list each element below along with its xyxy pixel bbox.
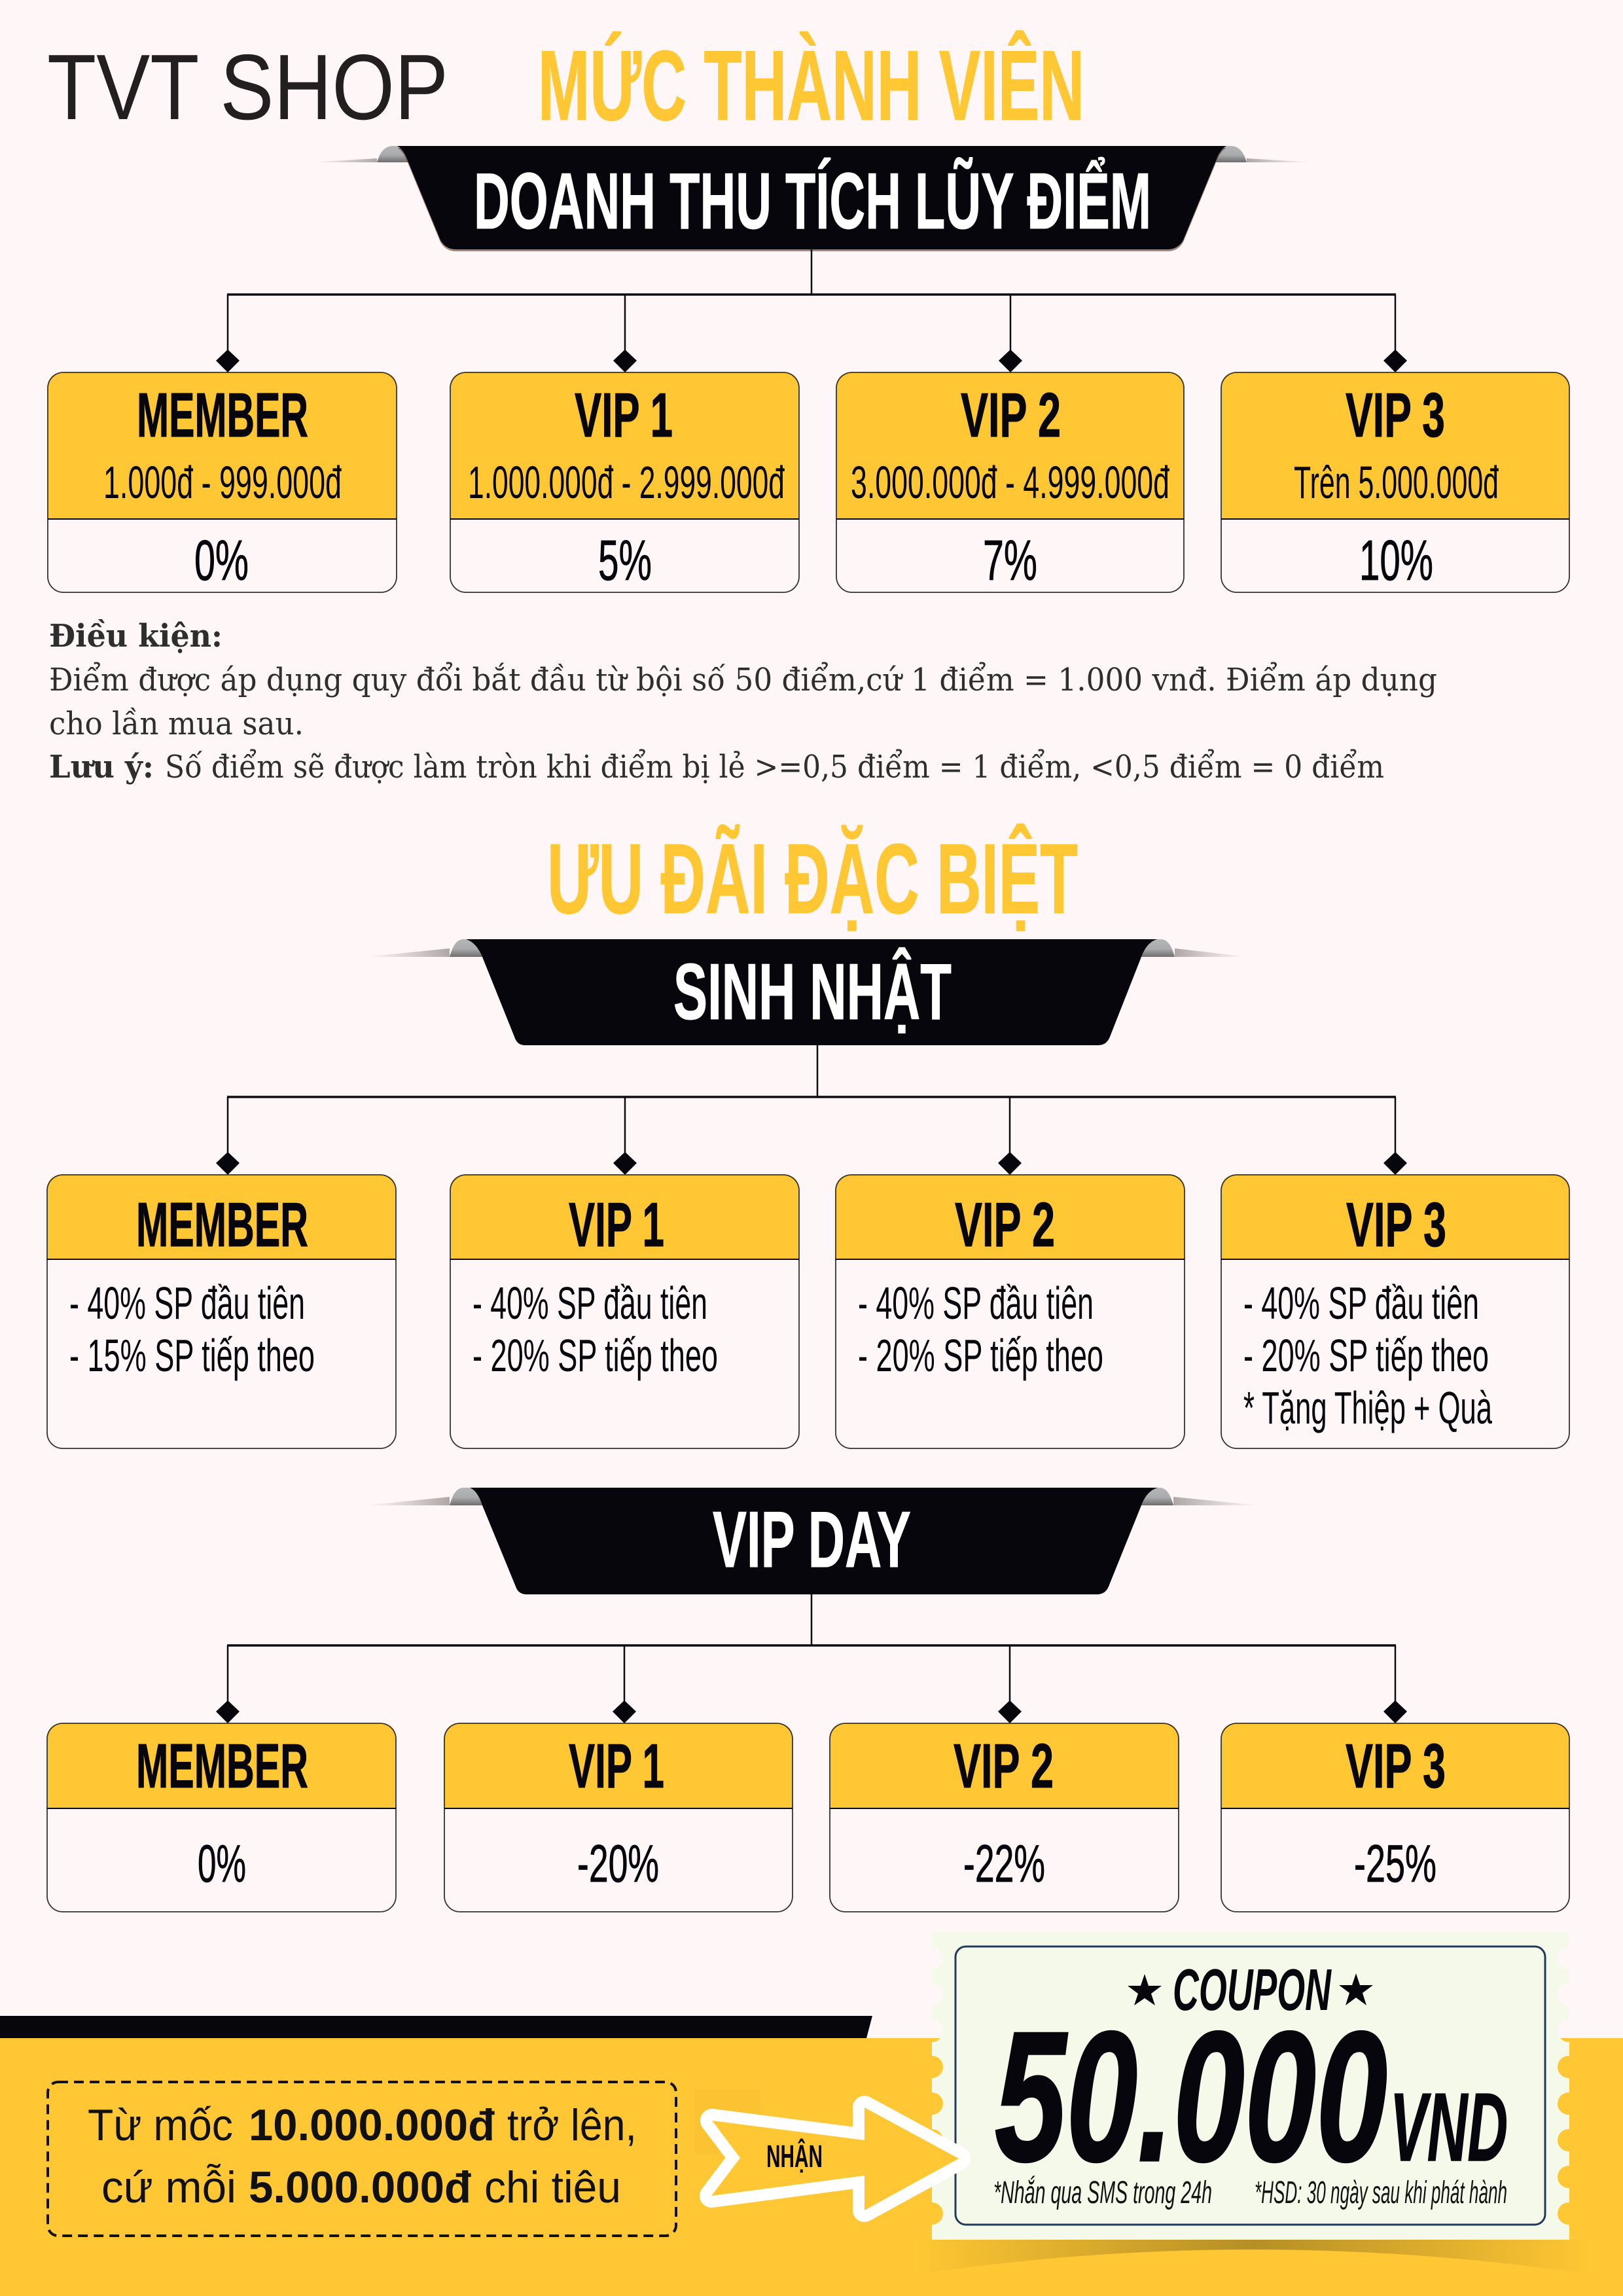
text block: conditions: Lưu ý: <box>49 749 154 785</box>
card: VIP 3 VIP day <box>1221 1723 1569 1912</box>
card: VIP 2 VIP day: VIP 2 <box>954 1731 1054 1801</box>
dashed callout: spending condition: Từ mốc <box>88 2100 233 2150</box>
card: VIP 1 VIP day: -20% <box>577 1835 659 1893</box>
card: VIP 2 level <box>836 372 1184 592</box>
card: VIP 3 VIP day: -25% <box>1354 1835 1436 1893</box>
connector tree: birthday <box>216 1045 1407 1175</box>
coupon currency: VND <box>1390 2073 1508 2181</box>
dashed callout: spending condition: trở lên, <box>507 2100 637 2150</box>
coupon note: SMS: *Nhắn qua SMS trong 24h <box>993 2176 1212 2210</box>
dashed callout: spending condition: cứ mỗi <box>101 2162 236 2212</box>
card: VIP 3 birthday: - 20% SP tiếp theo <box>1243 1330 1489 1381</box>
banner: VIP DAY <box>365 1488 1260 1594</box>
card: MEMBER VIP day: MEMBER <box>136 1731 308 1801</box>
title: TVT SHOP: TVT SHOP <box>47 35 448 139</box>
card: VIP 1 level: VIP 1 <box>575 380 673 450</box>
card: MEMBER level: 0% <box>194 529 249 592</box>
card: VIP 2 VIP day <box>830 1723 1179 1912</box>
card: VIP 3 level: VIP 3 <box>1346 380 1445 450</box>
card: VIP 2 birthday: - 20% SP tiếp theo <box>858 1330 1103 1381</box>
dashed callout: spending condition: chi tiêu <box>484 2162 621 2212</box>
connector tree: VIP day <box>216 1594 1407 1723</box>
card: VIP 1 birthday: - 20% SP tiếp theo <box>473 1330 718 1381</box>
card: VIP 3 level <box>1221 372 1569 592</box>
card: MEMBER level <box>48 372 397 592</box>
card: MEMBER birthday: - 40% SP đầu tiên <box>69 1278 305 1329</box>
card: VIP 3 level: Trên 5.000.000đ <box>1294 457 1499 508</box>
dashed callout: spending condition: 10.000.000đ <box>249 2100 495 2150</box>
card: VIP 3 birthday <box>1221 1175 1569 1448</box>
card: MEMBER level: 1.000đ - 999.000đ <box>103 457 342 508</box>
banner: VIP DAY: VIP DAY <box>713 1495 911 1584</box>
banner: SINH NHẬT: SINH NHẬT <box>673 947 952 1036</box>
card: VIP 3 VIP day: VIP 3 <box>1346 1731 1446 1801</box>
card: VIP 2 birthday: VIP 2 <box>955 1190 1055 1260</box>
card: VIP 1 VIP day: VIP 1 <box>569 1731 664 1801</box>
card: VIP 3 birthday: - 40% SP đầu tiên <box>1243 1278 1479 1329</box>
banner: DOANH THU TÍCH LŨY ĐIỂM: DOANH THU TÍCH LŨY ĐIỂM <box>474 156 1151 245</box>
text block: conditions: Số điểm sẽ được làm tròn khi điểm bị lẻ >=0,5 điểm = 1 điểm, <0,5 điểm = 0 điểm <box>165 749 1384 785</box>
dashed callout: spending condition <box>48 2082 676 2236</box>
card: VIP 3 level: 10% <box>1359 529 1433 592</box>
card: MEMBER level: MEMBER <box>137 380 308 450</box>
banner: DOANH THU TÍCH LŨY ĐIỂM <box>310 146 1314 251</box>
text block: conditions: Điểm được áp dụng quy đổi bắt đầu từ bội số 50 điểm,cứ 1 điểm = 1.000 vnđ. Điểm áp dụng <box>49 662 1437 698</box>
card: VIP 2 level: 7% <box>983 529 1037 592</box>
card: VIP 1 birthday: - 40% SP đầu tiên <box>473 1278 707 1329</box>
card: VIP 2 level: 3.000.000đ - 4.999.000đ <box>851 457 1169 508</box>
card: VIP 1 level <box>450 372 799 592</box>
coupon ticket <box>921 1932 1580 2240</box>
card: VIP 3 birthday: VIP 3 <box>1346 1190 1446 1260</box>
text block: conditions <box>49 618 1437 785</box>
card: VIP 2 birthday <box>836 1175 1185 1448</box>
footer band <box>0 2016 1623 2296</box>
arrow: NHẬN: NHẬN <box>766 2138 823 2174</box>
coupon label: COUPON <box>1173 1958 1332 2023</box>
arrow: NHẬN <box>711 2108 959 2210</box>
text block: conditions: Điều kiện: <box>49 618 223 655</box>
card: VIP 1 level: 1.000.000đ - 2.999.000đ <box>468 457 785 508</box>
card: VIP 2 birthday: - 40% SP đầu tiên <box>858 1278 1094 1329</box>
icon: star left <box>1128 1974 1162 2005</box>
coupon amount: 50.000 <box>995 1993 1387 2200</box>
card: MEMBER birthday: MEMBER <box>136 1190 308 1260</box>
card: VIP 2 VIP day: -22% <box>963 1835 1045 1893</box>
card: MEMBER birthday <box>47 1175 396 1448</box>
card: MEMBER VIP day <box>47 1723 396 1912</box>
ticket shadow <box>916 2240 1590 2274</box>
card: MEMBER birthday: - 15% SP tiếp theo <box>69 1330 315 1381</box>
card: MEMBER VIP day: 0% <box>198 1835 246 1893</box>
text block: conditions: cho lần mua sau. <box>49 706 304 742</box>
card: VIP 1 birthday <box>450 1175 799 1448</box>
connector tree: membership levels <box>216 249 1407 372</box>
icon: star right <box>1339 1973 1373 2005</box>
heading: MỨC THÀNH VIÊN: MỨC THÀNH VIÊN <box>538 30 1084 141</box>
card: VIP 1 level: 5% <box>598 529 652 592</box>
dashed callout: spending condition: 5.000.000đ <box>249 2162 471 2212</box>
card: VIP 2 level: VIP 2 <box>961 380 1061 450</box>
heading: ƯU ĐÃI ĐẶC BIỆT: ƯU ĐÃI ĐẶC BIỆT <box>547 823 1078 935</box>
banner: SINH NHẬT <box>365 939 1248 1045</box>
card: VIP 1 birthday: VIP 1 <box>569 1190 664 1260</box>
card: VIP 1 VIP day <box>444 1723 793 1912</box>
